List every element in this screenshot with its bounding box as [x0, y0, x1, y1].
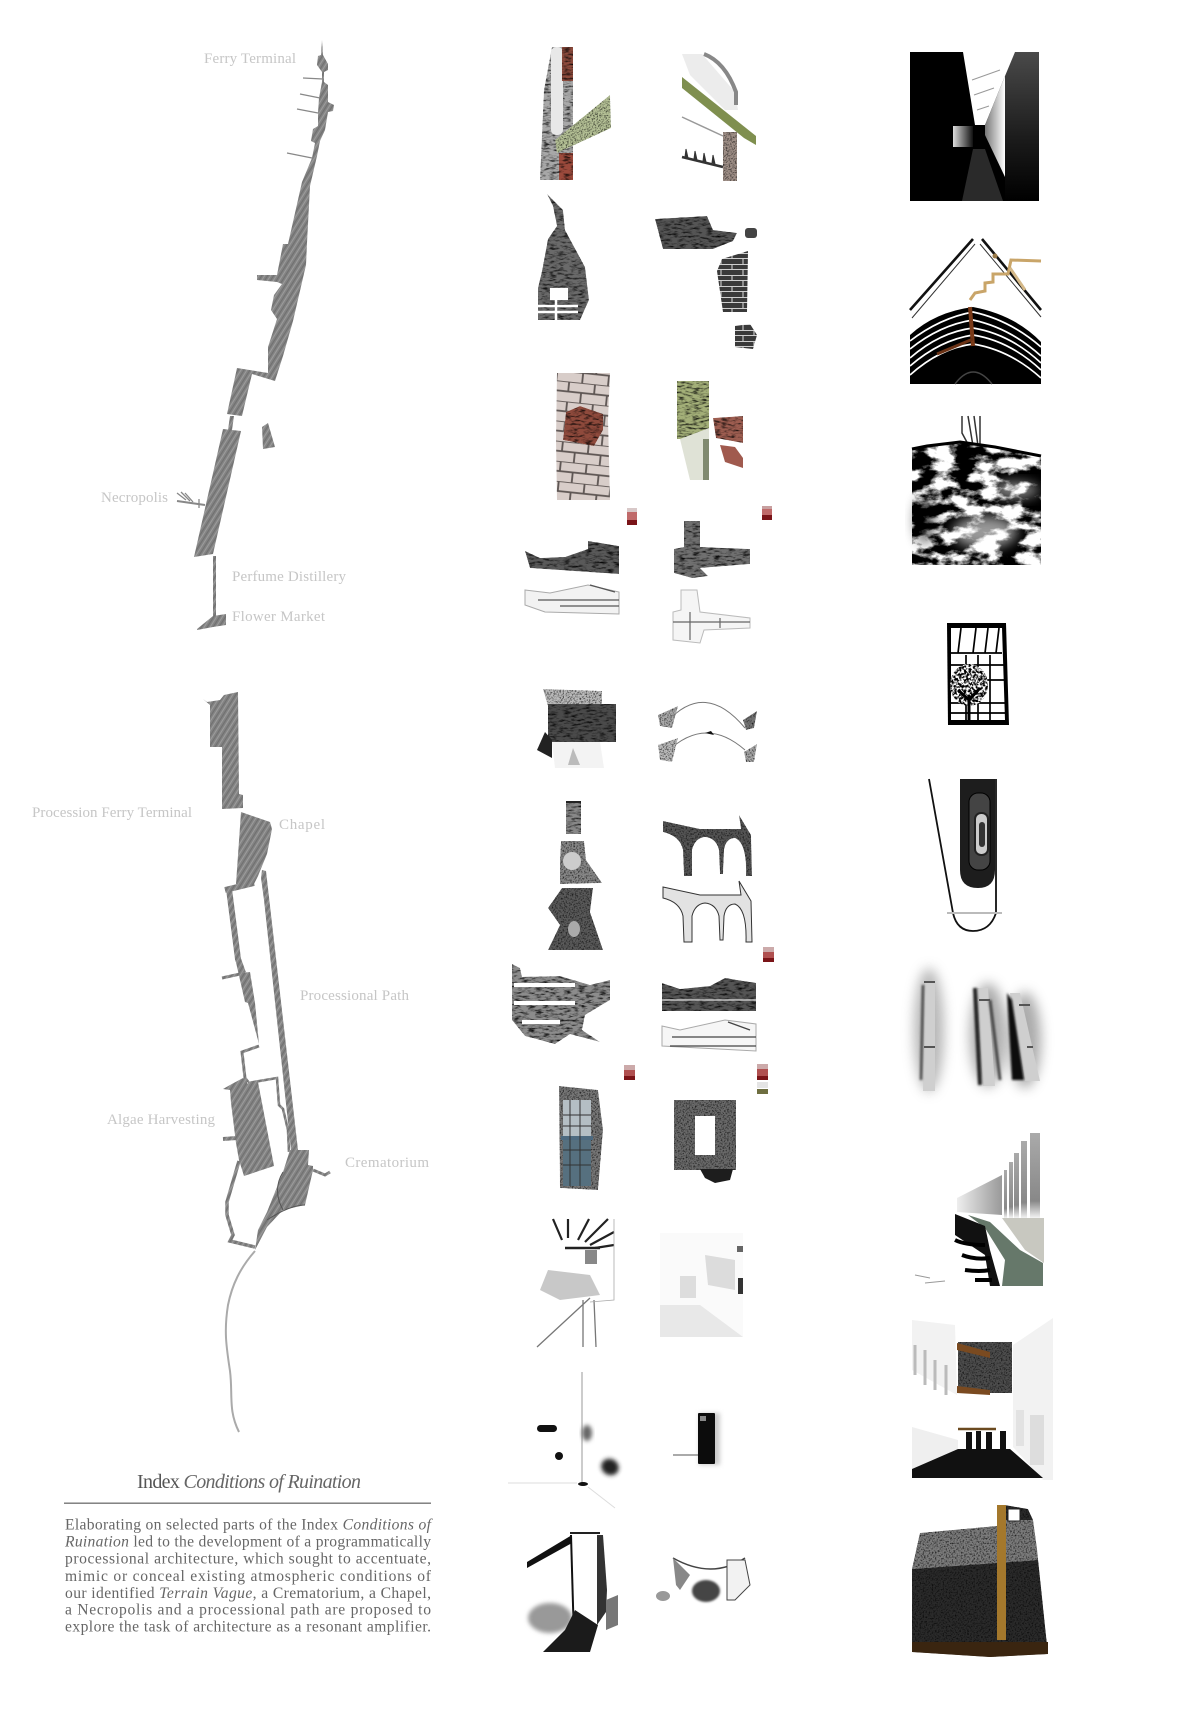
image: wall section with outline study	[525, 541, 619, 614]
image: pipe and mossy beam	[540, 47, 611, 180]
image: wall with window opening	[674, 1100, 736, 1183]
image: mossy diagonal beam and spikes	[682, 54, 756, 181]
swatch: brick tones	[762, 506, 772, 520]
image: draped cloth right	[656, 1558, 750, 1602]
heading rule	[64, 1502, 431, 1504]
image: mossy wall with red bricks	[677, 381, 743, 480]
label: Crematorium: Crematorium	[345, 1155, 429, 1171]
plan shape: lower programme blocks	[203, 692, 313, 1250]
image: ink-black mound and mast	[912, 416, 1041, 565]
text block: description: mimic or conceal existing atmospheric conditions of	[65, 1568, 432, 1585]
image: scattered brick fragments	[655, 216, 757, 349]
image: draped cloth left	[527, 1533, 618, 1652]
image: three timber sleepers	[914, 968, 1041, 1092]
text block: description: Elaborating on selected parts of the Index Conditions of	[65, 1516, 434, 1534]
image: collage corridor with figures	[912, 1318, 1053, 1480]
image: brick pier with red core	[556, 373, 610, 500]
image: pillars along a green canal	[915, 1133, 1044, 1286]
text block: description: processional architecture, which sought to accentuate,	[65, 1551, 431, 1568]
text block: description: explore the task of architecture as a resonant amplifier.	[65, 1619, 431, 1636]
image: cracked gothic arch	[910, 239, 1041, 384]
image: blurred coursed wall	[512, 964, 610, 1044]
swatch: brick tones	[624, 1065, 635, 1080]
label: Necropolis: Necropolis	[101, 490, 168, 506]
image: arcade fragment	[663, 815, 752, 876]
image: arcade outline study	[663, 881, 752, 942]
label: Ferry Terminal: Ferry Terminal	[204, 51, 296, 67]
image: blue-grey window	[559, 1086, 603, 1190]
text block: description: a Necropolis and a processional path are proposed to	[65, 1602, 431, 1619]
image: eroded brick wall fragment	[538, 194, 589, 320]
image: wall over pale arch	[537, 689, 616, 768]
swatch: brick tones	[627, 508, 637, 525]
swatch: brick tones	[763, 947, 774, 962]
piers	[177, 78, 323, 508]
image: spiral stair from below	[929, 779, 1002, 931]
image: black post box	[673, 1413, 720, 1465]
image: wall section with outline study	[662, 978, 756, 1051]
label: Perfume Distillery: Perfume Distillery	[232, 569, 346, 585]
text block: description: Ruination led to the development of a programmatically	[64, 1534, 431, 1550]
image: barred window with tree	[947, 623, 1009, 725]
image: paired arch fragments	[658, 702, 757, 762]
image: cross wall section with outline study	[673, 521, 750, 643]
image: black concrete block with rust strip	[912, 1505, 1048, 1657]
panel: upper site plan	[101, 40, 346, 630]
processional path strokes	[222, 883, 330, 1247]
image: faint street sketch	[660, 1233, 743, 1337]
image: dark corridor	[910, 52, 1039, 201]
label: Processional Path: Processional Path	[300, 988, 410, 1004]
heading: Index Conditions of Ruination	[137, 1471, 361, 1493]
plan shape: northern waterfront strip	[194, 40, 334, 630]
label: Flower Market: Flower Market	[232, 609, 326, 625]
label: Chapel: Chapel	[279, 817, 325, 833]
image: chimney and patched wall studies	[548, 801, 603, 950]
image: street sketch	[537, 1219, 614, 1347]
panel: lower site plan	[32, 692, 429, 1432]
river line	[226, 1251, 255, 1432]
swatch: brick and moss tones	[757, 1064, 768, 1094]
image: shadow blots on corner	[508, 1372, 622, 1508]
label: Procession Ferry Terminal: Procession Ferry Terminal	[32, 805, 192, 821]
label: Algae Harvesting: Algae Harvesting	[107, 1112, 216, 1128]
text block: description	[64, 1516, 434, 1636]
text block: description: our identified Terrain Vague, a Crematorium, a Chapel,	[65, 1585, 431, 1602]
